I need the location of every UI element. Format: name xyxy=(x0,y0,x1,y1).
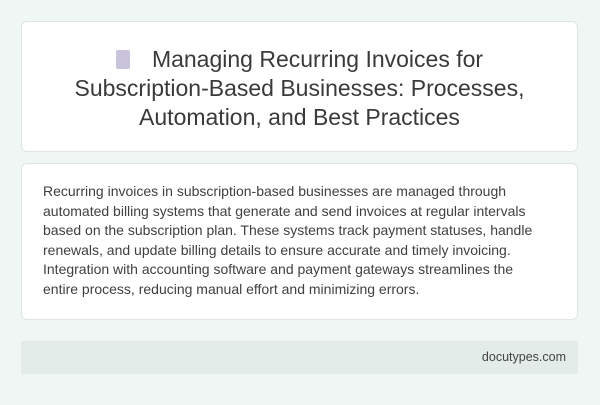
header card xyxy=(21,21,578,152)
description text xyxy=(43,183,532,297)
description text: based on the subscription plan. These systems track payment statuses, handle xyxy=(43,222,532,238)
title xyxy=(74,46,524,130)
description text: entire process, reducing manual effort and minimizing errors. xyxy=(43,280,419,296)
description text: automated billing systems that generate and send invoices at regular intervals xyxy=(43,202,526,218)
description text: renewals, and update billing details to ensure accurate and timely invoicing. xyxy=(43,242,511,258)
title: Automation, and Best Practices xyxy=(139,104,460,130)
description text: Integration with accounting software and payment gateways streamlines the xyxy=(43,261,513,277)
description text: Recurring invoices in subscription-based businesses are managed through xyxy=(43,183,506,199)
footer xyxy=(21,341,578,374)
description card xyxy=(21,163,578,320)
title: Subscription-Based Businesses: Processes, xyxy=(74,75,524,101)
footer: docutypes.com xyxy=(482,350,566,364)
title: Managing Recurring Invoices for xyxy=(152,46,483,72)
